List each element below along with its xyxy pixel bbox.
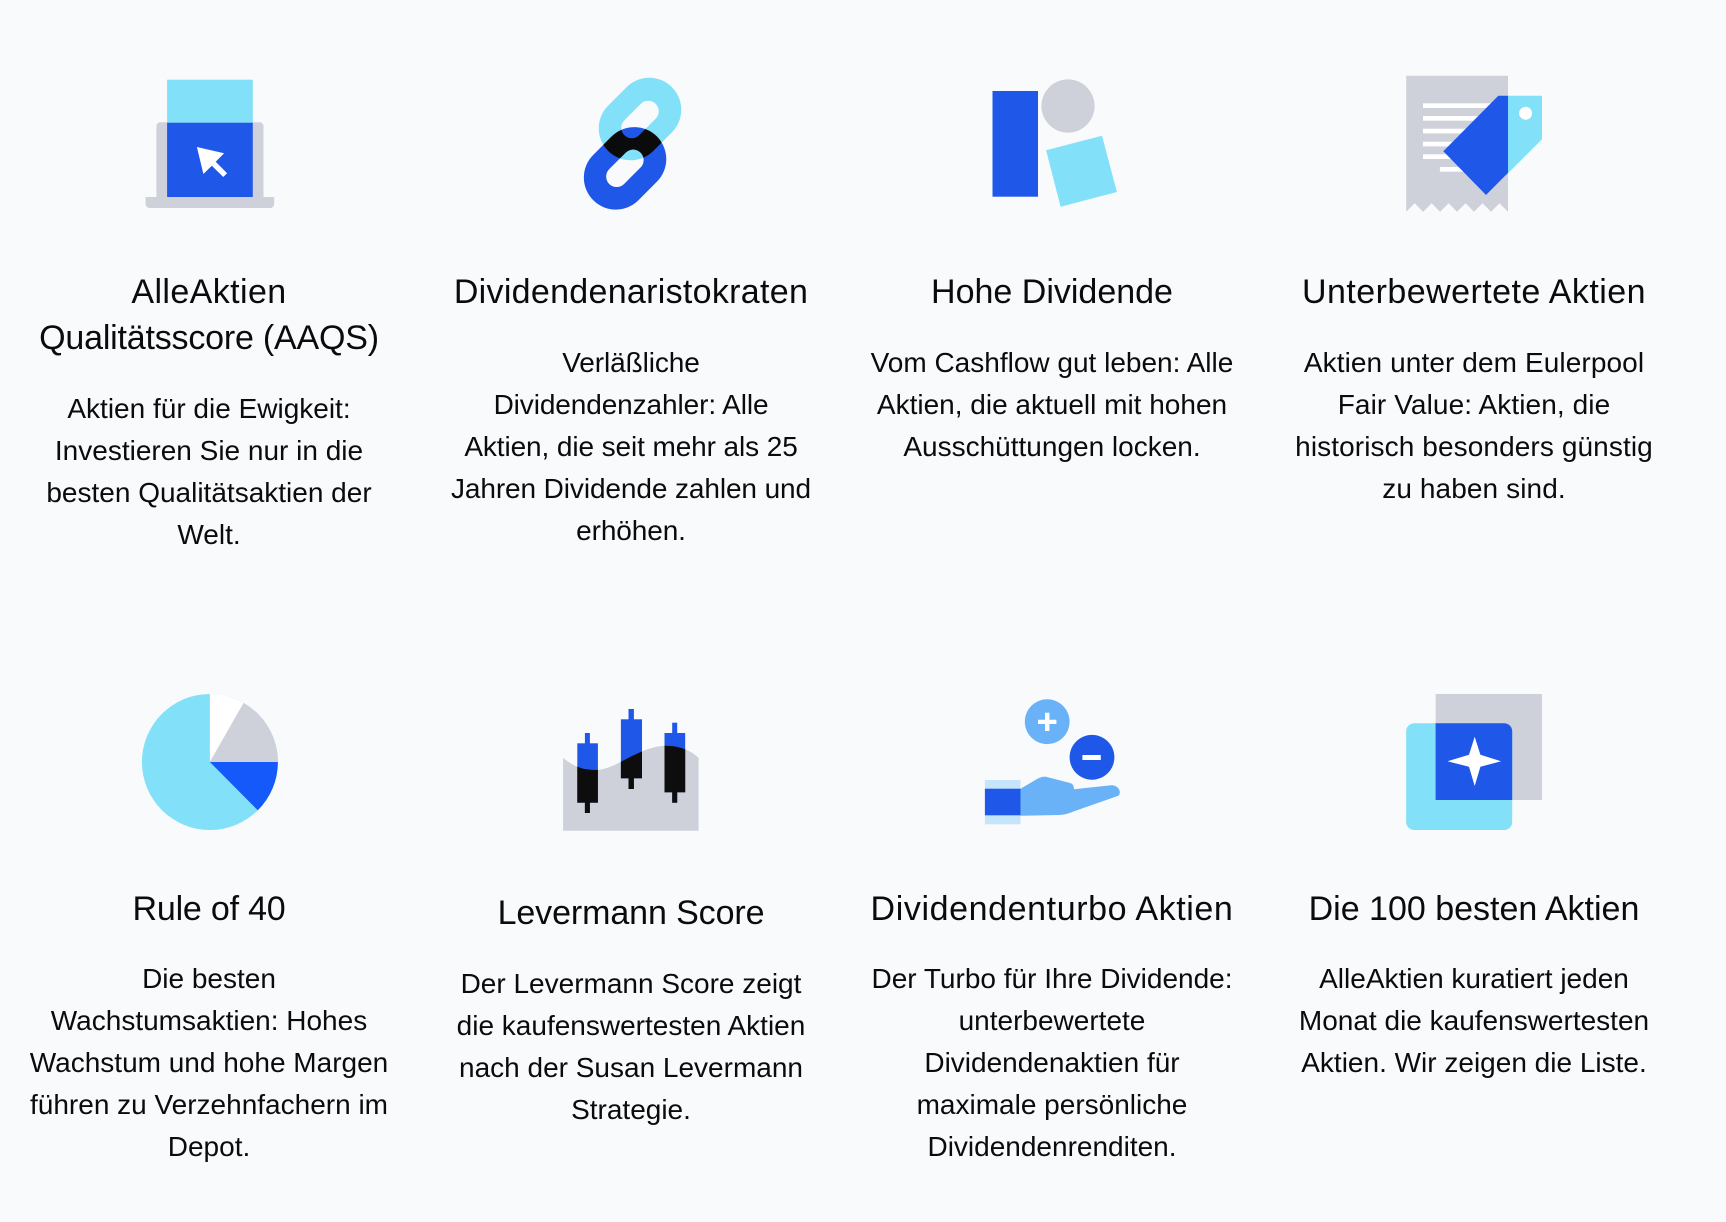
heading: AlleAktien Qualitätsscore: Qualitätsscore (AAQS) <box>39 319 379 357</box>
icon: geometric shapes <box>992 79 1117 207</box>
text: Die 100 besten Aktien description: Monat die kaufenswertesten <box>1299 1005 1649 1036</box>
panel: Dividendenaristokraten <box>451 78 811 546</box>
text: Dividendenturbo Aktien description: unterbewertete <box>959 1005 1145 1036</box>
text: Die 100 besten Aktien description: Aktien. Wir zeigen die Liste. <box>1301 1047 1647 1078</box>
text: AlleAktien Qualitätsscore description: Aktien für die Ewigkeit: <box>67 392 351 424</box>
text: Unterbewertete Aktien description: historisch besonders günstig <box>1295 430 1653 462</box>
text: Rule of 40 description: Wachstumsaktien: Hohes <box>51 1005 367 1036</box>
heading: Rule of 40: Rule of 40 <box>132 890 286 928</box>
text: Dividendenaristokraten description: Verläßliche <box>562 346 700 378</box>
text: Unterbewertete Aktien description <box>1295 346 1653 504</box>
text: Dividendenturbo Aktien description <box>871 963 1233 1162</box>
text: Unterbewertete Aktien description: Fair Value: Aktien, die <box>1338 388 1610 420</box>
text: Dividendenturbo Aktien description: Dividendenrenditen. <box>927 1131 1177 1162</box>
text: Die 100 besten Aktien description <box>1299 963 1649 1078</box>
text: Levermann Score description: Der Levermann Score zeigt <box>461 968 801 998</box>
panel: Hohe Dividende <box>870 79 1233 462</box>
text: Die 100 besten Aktien description: AlleAktien kuratiert jeden <box>1319 963 1629 994</box>
icon: laptop with cursor <box>146 80 274 208</box>
text: Dividendenturbo Aktien description: Dividendenaktien für <box>924 1047 1180 1078</box>
text: Levermann Score description: nach der Susan Levermann <box>459 1052 803 1082</box>
text: Dividendenaristokraten description: Aktien, die seit mehr als 25 <box>464 430 798 462</box>
panel: Levermann Score <box>457 709 805 1125</box>
text: Hohe Dividende description <box>870 346 1233 462</box>
heading: Hohe Dividende: Hohe Dividende <box>931 273 1173 311</box>
text: Rule of 40 description: Depot. <box>168 1131 250 1162</box>
heading: Unterbewertete Aktien: Unterbewertete Aktien <box>1302 273 1646 311</box>
heading: AlleAktien Qualitätsscore: AlleAktien <box>131 273 287 311</box>
text: Rule of 40 description: führen zu Verzehnfachern im <box>30 1089 388 1120</box>
panel: Dividendenturbo Aktien <box>871 699 1233 1162</box>
panel: Die 100 besten Aktien <box>1299 694 1649 1078</box>
icon: pie chart <box>142 694 278 830</box>
text: AlleAktien Qualitätsscore description: Welt. <box>177 518 241 550</box>
heading: AlleAktien Qualitätsscore <box>39 273 379 357</box>
icon: chain links <box>584 78 682 210</box>
text: Unterbewertete Aktien description: Aktien unter dem Eulerpool <box>1304 346 1644 378</box>
heading: Levermann Score: Levermann Score <box>498 894 764 932</box>
text: Levermann Score description: die kaufenswertesten Aktien <box>457 1010 805 1040</box>
icon: candlestick chart <box>563 709 698 831</box>
panel: Unterbewertete Aktien <box>1295 76 1653 504</box>
text: Rule of 40 description <box>30 963 388 1162</box>
icon: overlapping squares with star <box>1406 694 1542 830</box>
text: Rule of 40 description: Wachstum und hohe Margen <box>30 1047 388 1078</box>
text: Hohe Dividende description: Vom Cashflow gut leben: Alle <box>871 346 1233 378</box>
heading: Die 100 besten Aktien: Die 100 besten Aktien <box>1309 890 1639 928</box>
text: Dividendenturbo Aktien description: Der Turbo für Ihre Dividende: <box>871 963 1233 994</box>
text: Unterbewertete Aktien description: zu haben sind. <box>1382 472 1566 504</box>
text: Rule of 40 description: Die besten <box>142 963 276 994</box>
text: AlleAktien Qualitätsscore description: besten Qualitätsaktien der <box>46 476 372 508</box>
text: Levermann Score description <box>457 968 805 1125</box>
icon: hand with plus and minus coins <box>984 699 1120 824</box>
text: AlleAktien Qualitätsscore description: Investieren Sie nur in die <box>55 434 363 466</box>
text: Dividendenaristokraten description <box>451 346 811 546</box>
panel: AlleAktien Qualitätsscore <box>39 80 379 550</box>
text: Dividendenaristokraten description: Jahren Dividende zahlen und <box>451 472 811 504</box>
heading: Dividendenaristokraten: Dividendenaristokraten <box>454 273 808 311</box>
text: Levermann Score description: Strategie. <box>571 1094 691 1124</box>
text: Dividendenaristokraten description: erhöhen. <box>576 514 686 546</box>
text: Dividendenaristokraten description: Dividendenzahler: Alle <box>494 388 768 420</box>
text: Hohe Dividende description: Aktien, die aktuell mit hohen <box>877 388 1227 420</box>
panel: Rule of 40 <box>30 694 388 1162</box>
icon: receipt with price tag <box>1406 76 1542 212</box>
text: AlleAktien Qualitätsscore description <box>46 392 372 550</box>
heading: Dividendenturbo Aktien: Dividendenturbo Aktien <box>871 890 1233 928</box>
text: Hohe Dividende description: Ausschüttungen locken. <box>903 430 1201 462</box>
text: Dividendenturbo Aktien description: maximale persönliche <box>917 1089 1187 1120</box>
